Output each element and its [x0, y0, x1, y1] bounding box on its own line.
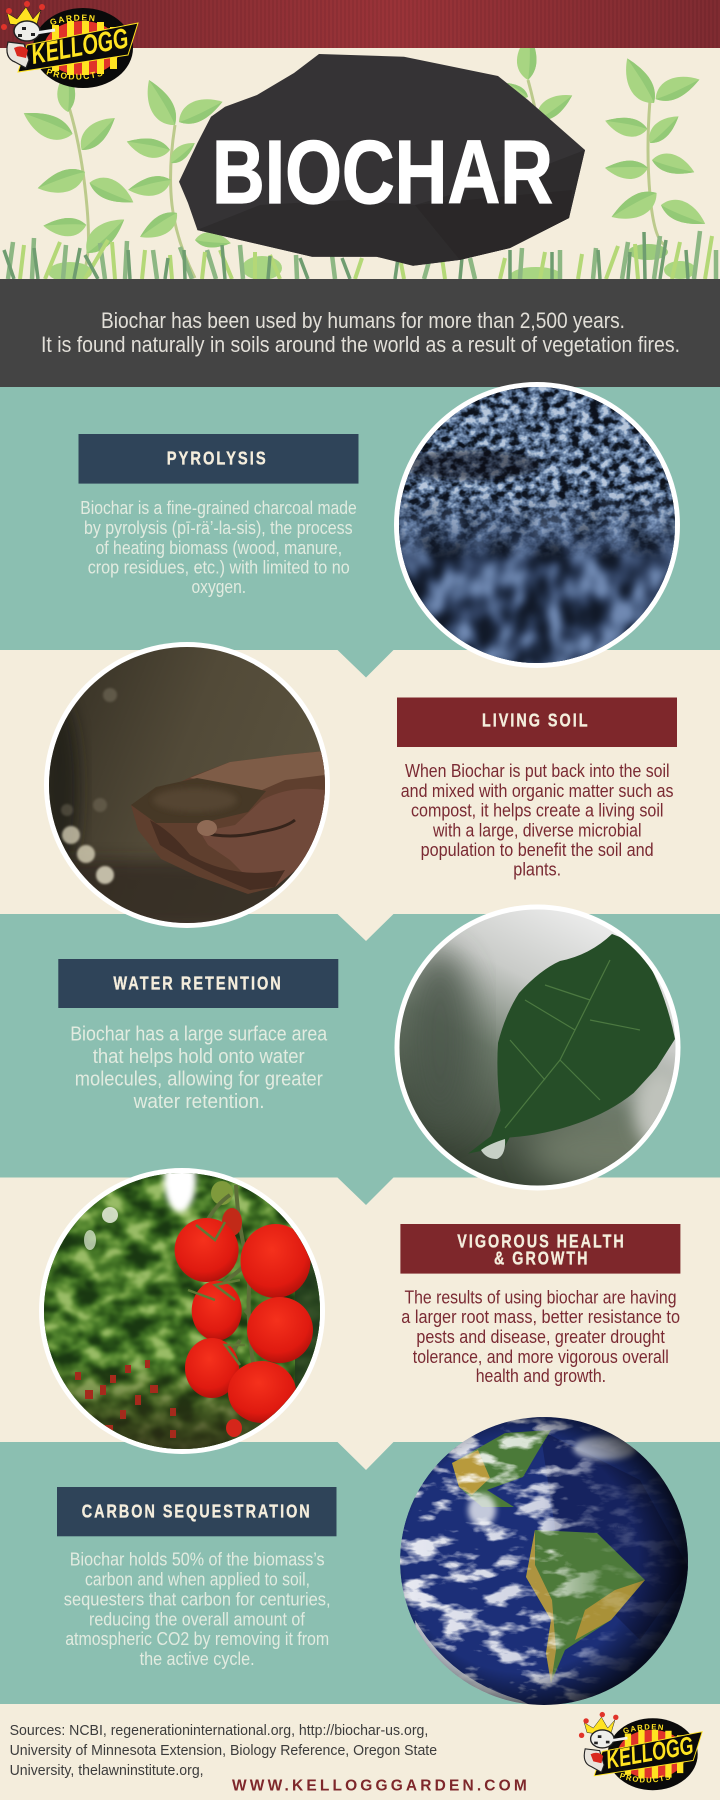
pyrolysis text: crop residues, etc.) with limited to no — [88, 558, 350, 578]
panel: carbon sequestration — [0, 1442, 720, 1704]
vigorous health text: tolerance, and more vigorous overall — [413, 1347, 669, 1367]
logo: Kellogg Garden Products (bottom) — [578, 1712, 703, 1790]
carbon sequestration text — [64, 1550, 331, 1669]
vigorous health text — [401, 1288, 680, 1386]
photo: leaf with water drop — [394, 904, 690, 1190]
photo: planet earth — [399, 1416, 690, 1710]
water retention heading: WATER RETENTION — [113, 973, 283, 993]
panel: pyrolysis — [0, 387, 720, 678]
carbon sequestration text: reducing the overall amount of — [89, 1609, 306, 1629]
living soil text: compost, it helps create a living soil — [411, 800, 664, 820]
sources: University, thelawninstitute.org, — [10, 1763, 204, 1779]
logo: Kellogg Garden Products (top) — [1, 1, 139, 88]
panel: intro band — [0, 279, 720, 387]
water retention heading — [58, 959, 338, 1008]
carbon sequestration heading — [57, 1487, 336, 1536]
sources — [10, 1723, 437, 1779]
water retention text: water retention. — [133, 1091, 265, 1113]
carbon sequestration text: the active cycle. — [140, 1649, 255, 1669]
pyrolysis text: of heating biomass (wood, manure, — [96, 538, 342, 558]
living soil text: and mixed with organic matter such as — [401, 781, 674, 801]
pyrolysis heading: PYROLYSIS — [167, 449, 268, 469]
carbon sequestration text: atmospheric CO2 by removing it from — [65, 1629, 329, 1649]
vigorous health heading: VIGOROUS HEALTH — [457, 1232, 626, 1252]
panel: footer — [10, 1712, 703, 1795]
top red band — [0, 0, 720, 48]
vigorous health heading — [400, 1224, 680, 1274]
water retention text: Biochar has a large surface area — [70, 1023, 328, 1045]
living soil text — [401, 761, 674, 880]
sources: Sources: NCBI, regenerationinternational.org, http://biochar-us.org, — [10, 1723, 428, 1739]
pyrolysis text: by pyrolysis (pī-rä’-la-sis), the process — [84, 518, 353, 538]
panel: vigorous health and growth — [39, 1148, 680, 1455]
intro text: Biochar has been used by humans for more than 2,500 years. — [101, 308, 625, 333]
pyrolysis text: oxygen. — [192, 577, 246, 597]
living soil text: When Biochar is put back into the soil — [405, 761, 670, 781]
living soil text: with a large, diverse microbial — [432, 820, 642, 840]
carbon sequestration text: Biochar holds 50% of the biomass’s — [70, 1550, 325, 1570]
photo: hands holding soil — [40, 642, 330, 930]
sources: University of Minnesota Extension, Biology Reference, Oregon State — [10, 1743, 437, 1759]
vigorous health text: a larger root mass, better resistance to — [401, 1307, 680, 1327]
carbon sequestration text: sequesters that carbon for centuries, — [64, 1589, 331, 1609]
living soil heading — [397, 698, 677, 747]
logo: Kellogg Garden Products (bottom): PRODUCTS — [620, 1772, 670, 1783]
title: BIOCHAR — [212, 123, 553, 223]
vigorous health text: The results of using biochar are having — [404, 1288, 676, 1308]
header illustration: plants and grass — [4, 34, 716, 285]
pyrolysis heading — [78, 434, 358, 484]
logo: Kellogg Garden Products (top): KELLOGG — [29, 22, 131, 70]
panel: water retention — [0, 914, 720, 1205]
biochar rock — [179, 54, 585, 266]
carbon sequestration text: carbon and when applied to soil, — [85, 1570, 310, 1590]
photo: crushed biochar — [394, 382, 680, 668]
vigorous health text: pests and disease, greater drought — [416, 1327, 665, 1347]
living soil heading: LIVING SOIL — [482, 710, 590, 730]
panel: living soil — [40, 642, 677, 930]
water retention text: molecules, allowing for greater — [75, 1069, 323, 1091]
website: WWW.KELLOGGGARDEN.COM — [232, 1778, 527, 1795]
pyrolysis text — [80, 498, 357, 597]
intro text — [41, 308, 680, 357]
pyrolysis text: Biochar is a fine-grained charcoal made — [80, 498, 357, 518]
water retention text — [70, 1023, 328, 1113]
vigorous health text: health and growth. — [476, 1366, 606, 1386]
living soil text: plants. — [513, 860, 561, 880]
logo: Kellogg Garden Products (top): PRODUCTS — [46, 68, 102, 80]
water retention text: that helps hold onto water — [93, 1046, 305, 1068]
logo: Kellogg Garden Products (top): GARDEN — [50, 14, 95, 25]
logo: Kellogg Garden Products (bottom): GARDEN — [623, 1724, 664, 1734]
carbon sequestration heading: CARBON SEQUESTRATION — [82, 1501, 312, 1521]
vigorous health heading: & GROWTH — [494, 1249, 590, 1269]
living soil text: population to benefit the soil and — [421, 840, 654, 860]
photo: tomatoes on the vine — [39, 1148, 325, 1455]
